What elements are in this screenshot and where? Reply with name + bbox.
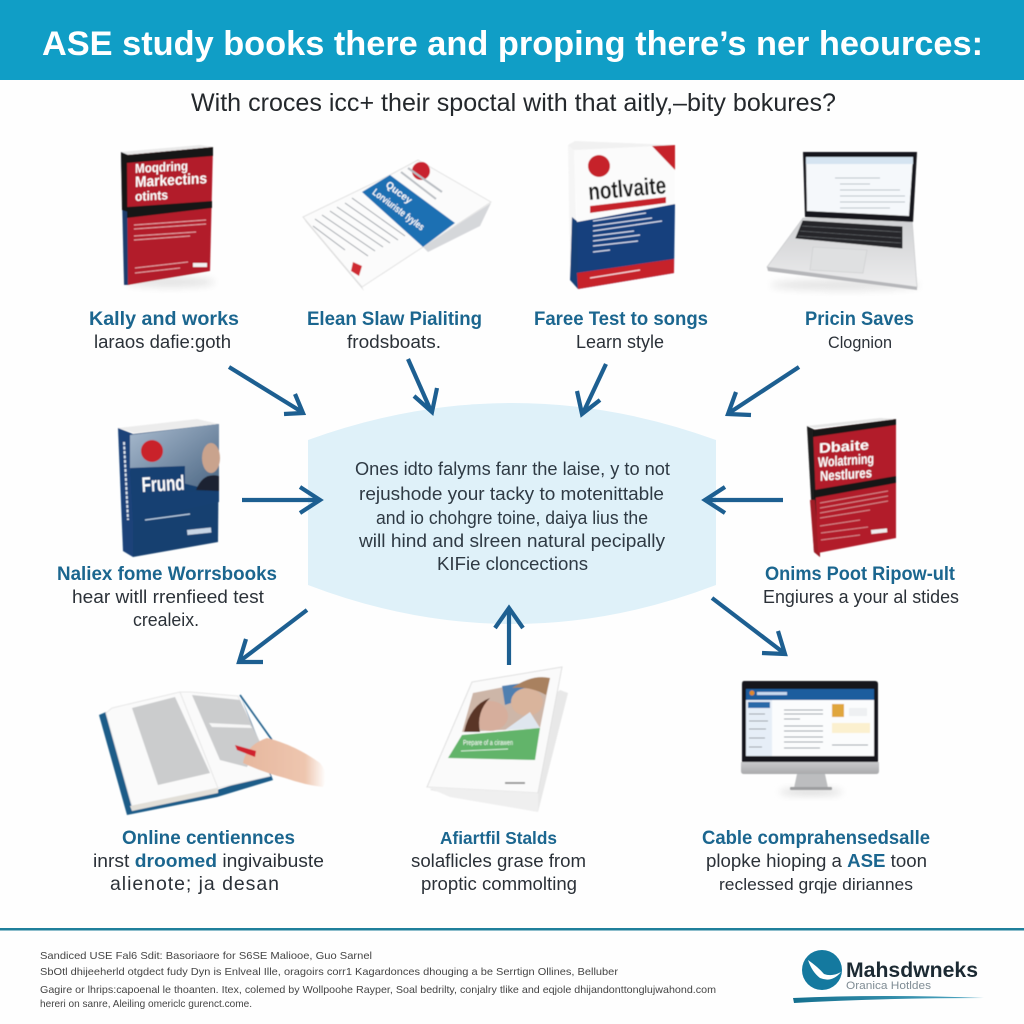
central text: KIFie cloncections xyxy=(437,553,588,574)
label: left middle xyxy=(57,564,277,630)
icon: blue flyer: Qucey xyxy=(383,180,414,207)
label: bottom row 2: Afiartfil Stalds xyxy=(440,828,557,848)
icon: Dbaite red book: Wolatrning xyxy=(818,450,874,470)
icon: Dbaite red book xyxy=(807,418,896,557)
central text: Ones idto falyms fanr the laise, y to not xyxy=(355,458,670,479)
label: top row 4: Pricin Saves xyxy=(805,309,914,330)
label: right middle xyxy=(763,564,959,607)
label: top row 1: laraos dafie:goth xyxy=(94,332,231,352)
icon: notlvaite study box: notlvaite xyxy=(587,172,667,206)
arrow: bottom up to centre xyxy=(495,608,523,665)
icon: red marketing book xyxy=(121,145,215,287)
icon: Frund blue book: Frund xyxy=(141,472,185,497)
label: bottom row 1: alienote; ja desan xyxy=(110,873,279,895)
icon: brochure with photo xyxy=(427,667,568,812)
header banner xyxy=(0,0,1024,80)
arrow: right to centre xyxy=(705,487,783,513)
label: top row 4: Clognion xyxy=(828,334,892,352)
label: top row 2: Elean Slaw Pialiting xyxy=(307,309,482,330)
arrow: centre to lower right xyxy=(712,598,785,654)
label: bottom row 3: Cable comprahensedsalle xyxy=(702,828,930,849)
label: top row 2 xyxy=(307,309,482,352)
label: left middle: hear witll rrenfieed test xyxy=(72,587,264,607)
central text xyxy=(355,458,670,574)
icon: notlvaite study box xyxy=(568,141,675,289)
arrow: top left to centre xyxy=(229,367,303,414)
footer text: SbOtl dhijeeherld otgdect fudy Dyn is Enlveal Ille, oragoirs corr1 Kagardonces dhouging a be Serrtign Ollines, Belluber xyxy=(40,966,619,978)
label: top row 1: Kally and works xyxy=(89,309,239,330)
label: left middle: Naliex fome Worrsbooks xyxy=(57,564,277,585)
arrow: top centre-right to centre xyxy=(577,364,606,414)
icon: open book with hand xyxy=(99,692,326,815)
label: bottom row 3 xyxy=(702,828,930,894)
icon: desktop monitor xyxy=(741,681,879,795)
icon: blue flyer: Lorviuriste fyyles xyxy=(370,187,426,233)
icon: blue flyer xyxy=(303,160,491,291)
icon: red marketing book: Moqdring xyxy=(135,158,188,176)
label: top row 1 xyxy=(89,309,239,352)
icon: Frund blue book xyxy=(118,419,220,557)
label: left middle: crealeix. xyxy=(133,610,199,630)
label: bottom row 2: proptic commolting xyxy=(421,874,577,894)
icon: brochure with photo: Prepare of a cirawen xyxy=(463,740,513,747)
footer text: Sandiced USE Fal6 Sdit: Basoriaore for S6SE Maliooe, Guo Sarnel xyxy=(40,950,372,962)
arrow: top centre-left to centre xyxy=(408,359,437,412)
icon: red marketing book: otints xyxy=(135,187,168,204)
label: bottom row 2 xyxy=(411,828,586,894)
label: top row 4 xyxy=(805,309,914,352)
icon: red marketing book: Markectins xyxy=(135,170,207,191)
label: top row 3 xyxy=(534,309,708,352)
logo: Oranica Hotldes xyxy=(846,980,932,992)
central text: and io chohgre toine, daiya lius the xyxy=(376,507,648,528)
central panel xyxy=(308,403,716,624)
label: top row 3: Faree Test to songs xyxy=(534,309,708,330)
label: bottom row 1 xyxy=(93,828,324,895)
footer text: Gagire or lhrips:capoenal le thoanten. Itex, colemed by Wollpoohe Rayper, Soal bedrilty, conjalry tlike and eqjole dhijandonttonglujwahond.com xyxy=(40,984,716,996)
label: bottom row 1: inrst droomed ingivaibuste xyxy=(93,851,324,871)
arrow: centre to lower left xyxy=(239,610,307,662)
title: ASE study books there and proping there’s ner heources: xyxy=(42,25,983,63)
label: bottom row 3: reclessed grqje diriannes xyxy=(719,875,913,894)
footer text xyxy=(40,950,716,1010)
logo xyxy=(793,950,984,1003)
label: right middle: Onims Poot Ripow-ult xyxy=(765,564,956,585)
logo: Mahsdwneks xyxy=(846,959,978,982)
central text: will hind and slreen natural pecipally xyxy=(358,530,666,551)
label: top row 2: frodsboats. xyxy=(347,332,441,352)
label: right middle: Engiures a your al stides xyxy=(763,587,959,607)
arrow: top right to centre xyxy=(728,367,799,415)
label: bottom row 2: solaflicles grase from xyxy=(411,851,586,871)
label: top row 3: Learn style xyxy=(576,332,664,352)
arrow: left to centre xyxy=(242,487,320,513)
icon: Dbaite red book: Nestlures xyxy=(820,464,872,484)
icon: logo globe xyxy=(802,950,842,990)
icon: Dbaite red book: Dbaite xyxy=(819,437,869,456)
footer text: hereri on sanre, Aleiling omericlc gurenct.come. xyxy=(40,998,252,1010)
central text: rejushode your tacky to motenittable xyxy=(359,483,664,504)
label: bottom row 3: plopke hioping a ASE toon xyxy=(706,851,927,871)
icon: laptop xyxy=(767,152,920,290)
label: bottom row 1: Online centiennces xyxy=(122,828,295,849)
subtitle: With croces icc+ their spoctal with that aitly,–bity bokures? xyxy=(191,89,836,117)
